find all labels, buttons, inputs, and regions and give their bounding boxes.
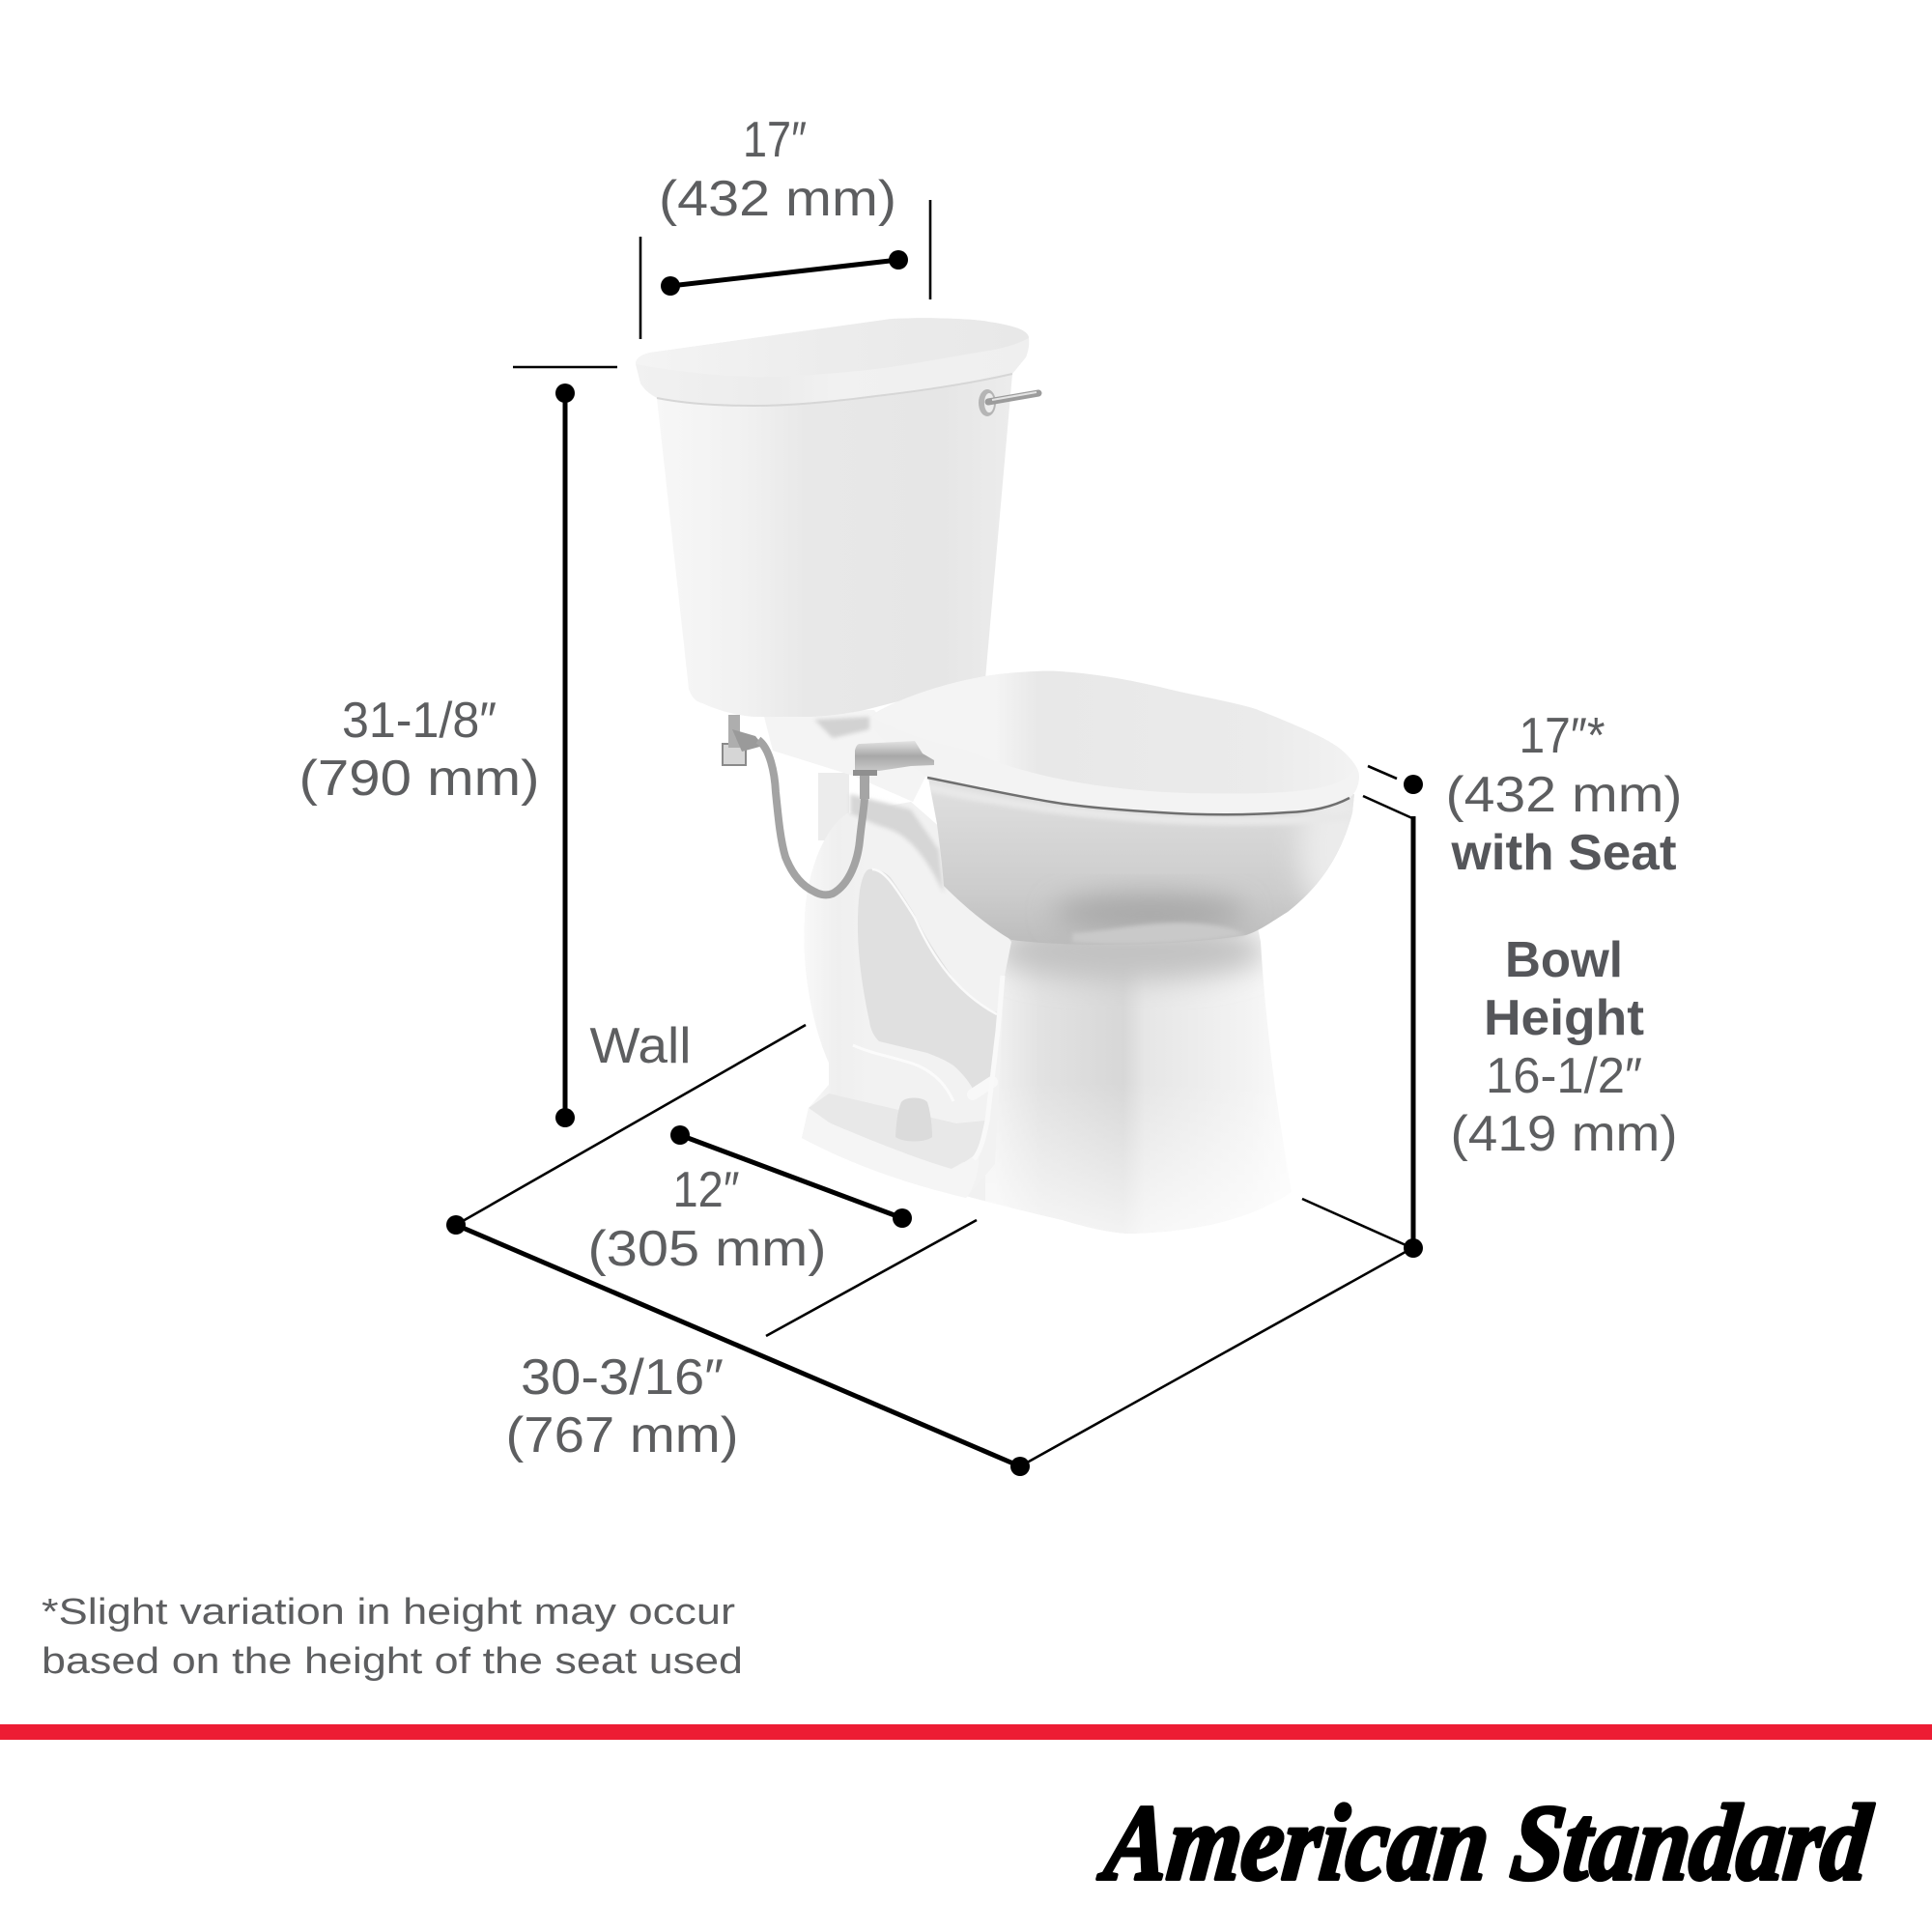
- label: bowl height: Bowl: [1505, 932, 1623, 988]
- water supply valve: [723, 715, 763, 765]
- label: bowl height: (432 mm): [1445, 767, 1683, 823]
- label: bowl height: Height: [1484, 990, 1644, 1046]
- label: bowl height: (419 mm): [1451, 1106, 1677, 1162]
- stub pipe: [973, 1082, 992, 1094]
- label: wall: Wall: [589, 1018, 692, 1074]
- toilet illustration: [636, 318, 1377, 1246]
- floor bolt cap: [895, 1097, 932, 1142]
- bowl rim highlight: [927, 787, 1352, 821]
- bidet hinge control: [853, 741, 934, 799]
- supply hose: [758, 740, 865, 895]
- label: bowl height: with Seat: [1450, 825, 1677, 881]
- bowl dark core: [1053, 894, 1246, 932]
- flush handle: [979, 389, 1038, 416]
- label: rough-in: (305 mm): [587, 1221, 827, 1277]
- toilet bowl: [927, 773, 1377, 945]
- label: total height: 31-1/8″: [342, 693, 497, 749]
- recessed side panel: [858, 869, 998, 1089]
- dimension: total height: [513, 367, 617, 1127]
- shadow under bowl: [995, 923, 1265, 980]
- footnote: based on the height of the seat used: [42, 1641, 743, 1682]
- label: bowl height: [1445, 708, 1683, 1162]
- back post: [818, 773, 849, 840]
- label: tank width: (432 mm): [659, 171, 896, 227]
- toilet pedestal and trapway: [802, 794, 1304, 1246]
- dimension: tank width: [640, 200, 930, 339]
- red divider bar: [0, 1724, 1932, 1740]
- trapway highlight line: [872, 869, 997, 1014]
- arch and left side of body: [802, 807, 1011, 1198]
- label: total depth: 30-3/16″: [521, 1350, 724, 1406]
- base plate front lip: [802, 1108, 979, 1198]
- tank bolt bracket: [763, 710, 927, 802]
- shaded neck between arch and bowl: [850, 794, 944, 894]
- label: bowl height: 16-1/2″: [1486, 1048, 1642, 1104]
- bidet seat lid: [872, 671, 1359, 814]
- pedestal bottom fade: [999, 1128, 1236, 1234]
- recess right edge highlight: [974, 976, 1003, 1159]
- label: bowl height: 17″*: [1519, 708, 1605, 764]
- bracket shadow: [814, 717, 869, 738]
- water tank: [657, 374, 1012, 717]
- floor base plate: [809, 1094, 985, 1169]
- label: total height: (790 mm): [299, 751, 539, 807]
- dimension: rough-in: [670, 1125, 912, 1228]
- tank lid: [636, 318, 1029, 406]
- bowl lower lip: [1072, 923, 1246, 945]
- footnote: [42, 1592, 743, 1682]
- label: total height: [299, 693, 539, 807]
- dimension: bowl height: [1363, 766, 1423, 1258]
- footnote: *Slight variation in height may occur: [42, 1592, 735, 1633]
- bowl right light: [1294, 796, 1354, 898]
- label: tank width: [659, 112, 896, 227]
- ridge highlight: [853, 1045, 953, 1101]
- label: tank width: 17″: [743, 112, 807, 168]
- label: total depth: [506, 1350, 738, 1463]
- label: rough-in: 12″: [672, 1162, 740, 1218]
- label: rough-in: [587, 1162, 827, 1277]
- dimension: total depth: [446, 1025, 1412, 1476]
- label: total depth: (767 mm): [506, 1407, 738, 1463]
